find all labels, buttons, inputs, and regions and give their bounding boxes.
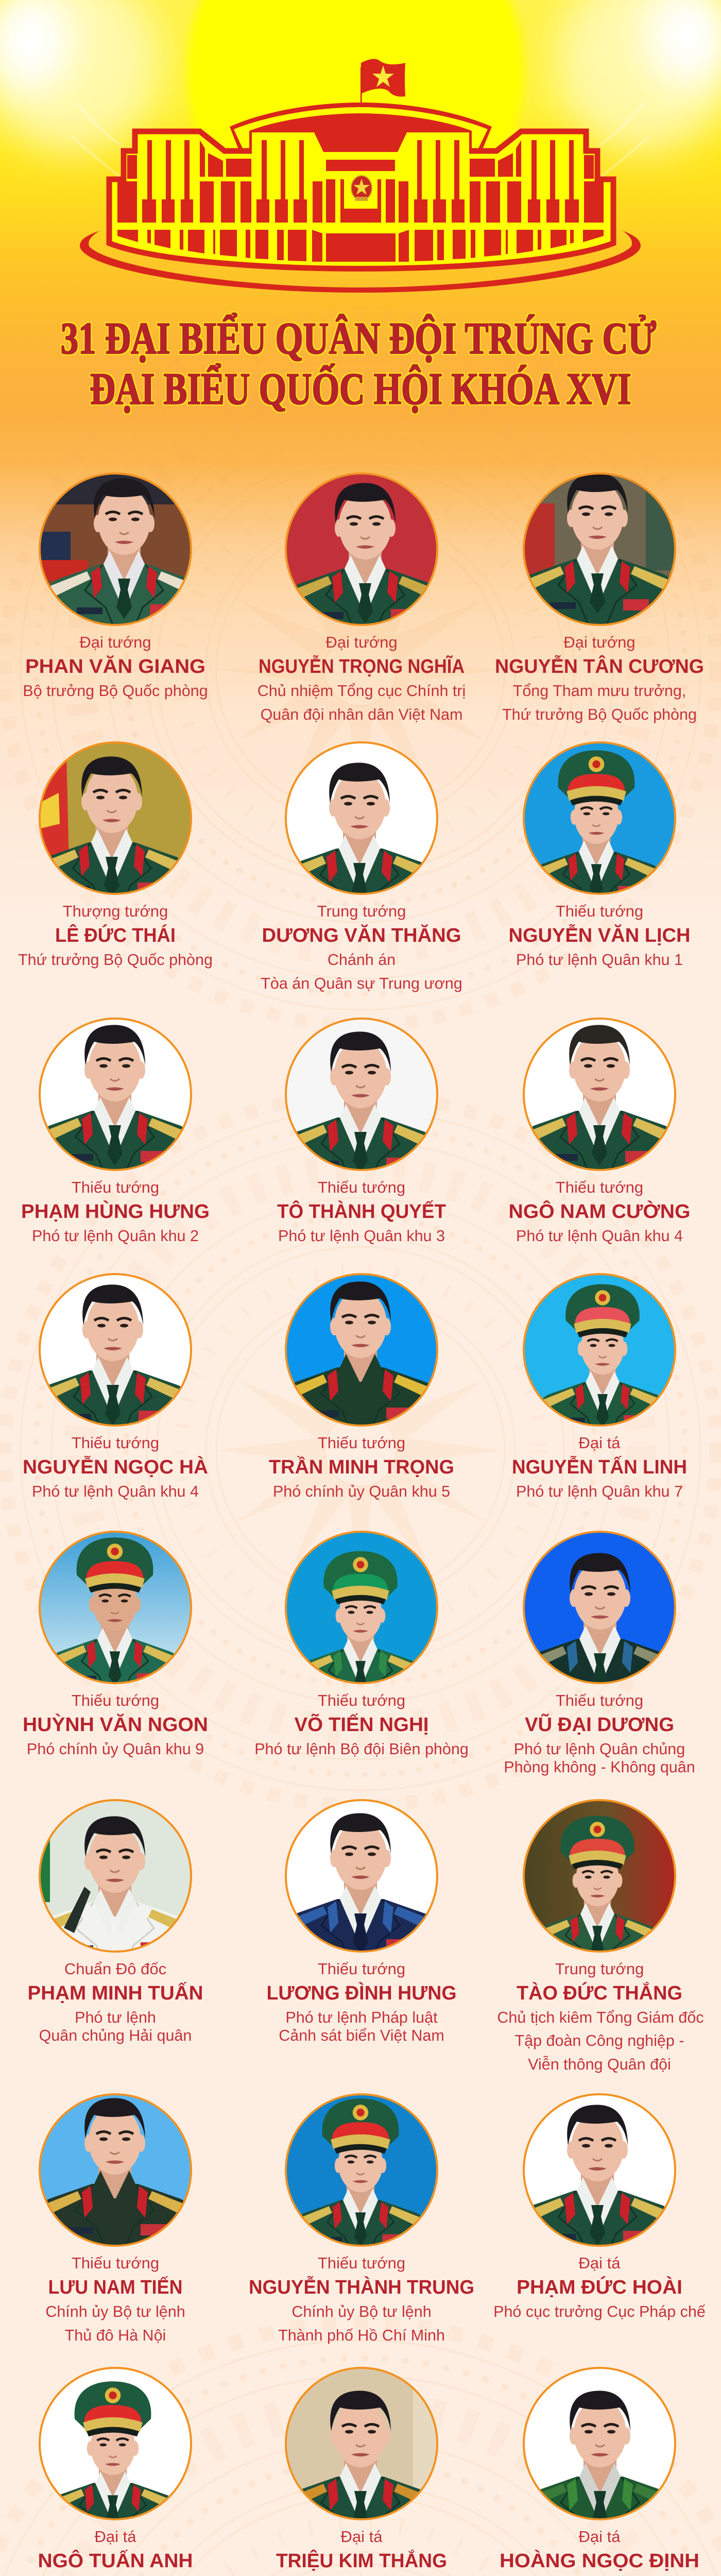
name: TRIỆU KIM THẮNG	[276, 2549, 447, 2572]
portrait	[29, 1531, 200, 1738]
role: Chánh án	[328, 951, 396, 969]
role: Tổng Tham mưu trưởng,	[513, 682, 686, 700]
rank: Thượng tướng	[63, 902, 168, 920]
rank: Thiếu tướng	[318, 1691, 405, 1709]
name: HOÀNG NGỌC ĐỊNH	[500, 2549, 699, 2572]
rank: Chuẩn Đô đốc	[64, 1960, 166, 1978]
panel: Ngô Tuấn Anh	[2, 2367, 229, 2576]
rank: Thiếu tướng	[556, 1691, 643, 1709]
role: Thủ đô Hà Nội	[65, 2327, 166, 2344]
panel: Phạm Hùng Hưng	[21, 1018, 210, 1245]
icon: base ring	[80, 231, 641, 293]
name: VÕ TIẾN NGHỊ	[295, 1713, 428, 1736]
portrait	[14, 1799, 215, 2019]
name: NGÔ NAM CƯỜNG	[509, 1199, 690, 1223]
panel: Lê Đức Thái	[18, 741, 213, 969]
rank: Đại tá	[341, 2528, 383, 2546]
name: TÔ THÀNH QUYẾT	[277, 1199, 446, 1223]
name: NGUYỄN VĂN LỊCH	[509, 924, 690, 946]
icon: building facade	[109, 131, 613, 269]
role: Quân đội nhân dân Việt Nam	[261, 706, 462, 723]
role: Bộ trưởng Bộ Quốc phòng	[23, 682, 208, 700]
role	[502, 682, 697, 723]
name: PHẠM HÙNG HƯNG	[21, 1200, 210, 1223]
panel: Phan Văn Giang	[23, 472, 208, 700]
panel: Lương Đình Hưng	[248, 1799, 475, 2047]
role: Cảnh sát biển Việt Nam	[279, 2027, 444, 2044]
portrait	[27, 2367, 198, 2576]
panel: Võ Tiến Nghị	[248, 1531, 475, 1760]
portrait	[285, 472, 438, 626]
role: Thứ trưởng Bộ Quốc phòng	[18, 951, 213, 969]
role	[278, 2303, 445, 2344]
panel: Tào Đức Thắng	[486, 1799, 713, 2070]
rank: Đại tướng	[325, 633, 398, 651]
rank: Đại tá	[579, 1434, 621, 1452]
panel: Vũ Đại Dương	[486, 1531, 713, 1778]
rank: Thiếu tướng	[556, 1178, 643, 1196]
role: Phòng không - Không quân	[504, 1758, 695, 1776]
name: VŨ ĐẠI DƯƠNG	[525, 1713, 674, 1736]
role: Phó tư lệnh Bộ đội Biên phòng	[254, 1740, 469, 1758]
portrait	[523, 472, 676, 626]
panel: Trần Minh Trọng	[248, 1273, 475, 1503]
portrait	[497, 2093, 698, 2307]
role: Thành phố Hồ Chí Minh	[278, 2327, 445, 2344]
role: Phó tư lệnh Quân khu 1	[516, 951, 683, 969]
role: Phó tư lệnh Quân khu 7	[516, 1483, 683, 1500]
panel: Triệu Kim Thắng	[248, 2367, 475, 2576]
rank: Thiếu tướng	[72, 2254, 159, 2272]
role: Phó tư lệnh Quân chủng	[514, 1740, 685, 1758]
name: TÀO ĐỨC THẮNG	[517, 1981, 682, 2004]
role	[258, 682, 466, 723]
rank: Trung tướng	[555, 1960, 644, 1978]
portrait	[515, 1799, 680, 2009]
name: LÊ ĐỨC THÁI	[55, 924, 176, 946]
name: NGUYỄN THÀNH TRUNG	[249, 2276, 474, 2298]
panel: Hoàng Ngọc Định	[486, 2367, 713, 2576]
portrait	[278, 1531, 443, 1744]
name: NGÔ TUẤN ANH	[38, 2549, 193, 2572]
icon: National Assembly building with flag	[39, 59, 676, 889]
name: PHẠM ĐỨC HOÀI	[517, 2276, 682, 2298]
rank: Thiếu tướng	[318, 2254, 405, 2272]
role: Viễn thông Quân đội	[528, 2055, 671, 2073]
role: Chủ tịch kiêm Tổng Giám đốc	[497, 2009, 704, 2026]
role: Thứ trưởng Bộ Quốc phòng	[502, 706, 697, 723]
panel: Phạm Minh Tuấn	[2, 1799, 229, 2047]
role: Tòa án Quân sự Trung ương	[261, 975, 462, 992]
name: LƯƠNG ĐÌNH HƯNG	[267, 1981, 456, 2004]
rank: Thiếu tướng	[72, 1434, 159, 1452]
rank: Đại tá	[95, 2528, 136, 2546]
rank: Thiếu tướng	[556, 902, 643, 920]
portrait	[39, 472, 192, 626]
role	[497, 2009, 704, 2073]
name: DƯƠNG VĂN THĂNG	[262, 924, 461, 946]
role: Chính ủy Bộ tư lệnh	[45, 2303, 185, 2320]
panel: Nguyễn Thành Trung	[248, 2093, 475, 2347]
panel: Ngô Nam Cường	[486, 1018, 713, 1247]
role: Phó chính ủy Quân khu 9	[27, 1740, 204, 1758]
name: NGUYỄN TRỌNG NGHĨA	[259, 655, 465, 677]
background: top glow	[0, 0, 721, 180]
name: PHAN VĂN GIANG	[25, 655, 205, 677]
role	[45, 2303, 185, 2344]
panel: Nguyễn Ngọc Hà	[2, 1273, 229, 1503]
role: Chủ nhiệm Tổng cục Chính trị	[258, 682, 466, 700]
name: TRẦN MINH TRỌNG	[269, 1455, 454, 1478]
panel: Nguyễn Tân Cương	[495, 472, 704, 723]
icon: dome	[230, 103, 492, 155]
role: Quân chủng Hải quân	[39, 2027, 192, 2044]
portrait	[260, 2367, 461, 2576]
rank: Đại tướng	[563, 633, 636, 651]
name: NGUYỄN NGỌC HÀ	[23, 1455, 208, 1478]
portrait	[500, 1531, 700, 1755]
portrait	[259, 741, 460, 965]
rank: Thiếu tướng	[72, 1178, 159, 1196]
portrait	[520, 1273, 685, 1478]
portrait	[499, 1018, 700, 1227]
portrait	[14, 1018, 215, 1227]
portrait	[14, 2093, 215, 2300]
portrait	[260, 1018, 461, 1234]
name: HUỲNH VĂN NGON	[23, 1713, 208, 1736]
panel: Dương Văn Thăng	[261, 741, 462, 992]
role: Phó tư lệnh Quân khu 2	[32, 1227, 199, 1245]
rank: Thiếu tướng	[318, 1434, 405, 1452]
portrait	[275, 2093, 446, 2299]
role: Phó tư lệnh Quân khu 4	[32, 1483, 199, 1500]
role: Phó tư lệnh	[75, 2009, 156, 2026]
role: Phó tư lệnh Quân khu 3	[278, 1227, 445, 1245]
role	[279, 2009, 444, 2044]
rank: Thiếu tướng	[318, 1960, 405, 1978]
role	[39, 2009, 192, 2044]
portrait	[12, 1273, 213, 1487]
panel: Phạm Đức Hoài	[486, 2093, 713, 2323]
rank: Đại tá	[579, 2254, 621, 2272]
icon: national emblem	[351, 176, 372, 201]
rank: Thiếu tướng	[72, 1691, 159, 1709]
role	[261, 951, 462, 992]
panel: Huỳnh Văn Ngon	[2, 1531, 229, 1760]
panel: Nguyễn Văn Lịch	[509, 741, 690, 969]
rank: Thiếu tướng	[318, 1178, 405, 1196]
icon: flag	[360, 59, 405, 103]
rank: Trung tướng	[317, 902, 406, 920]
portrait	[260, 1799, 461, 2015]
name: NGUYỄN TÂN CƯƠNG	[495, 655, 704, 677]
rank: Đại tá	[579, 2528, 621, 2546]
title	[60, 311, 658, 414]
portrait	[260, 1273, 461, 1484]
role: Phó tư lệnh Quân khu 4	[516, 1227, 683, 1245]
role: Chính ủy Bộ tư lệnh	[291, 2303, 432, 2320]
name: NGUYỄN TẤN LINH	[512, 1455, 687, 1478]
panel: Nguyễn Tấn Linh	[486, 1273, 713, 1503]
panel: Nguyễn Trọng Nghĩa	[258, 472, 466, 723]
portrait	[11, 741, 212, 959]
role: Phó tư lệnh Pháp luật	[285, 2009, 438, 2026]
role: Phó cục trưởng Cục Pháp chế	[493, 2303, 706, 2320]
role	[504, 1740, 695, 1776]
portrait	[500, 2367, 700, 2576]
role: Tập đoàn Công nghiệp -	[515, 2032, 684, 2049]
role: Phó chính ủy Quân khu 5	[273, 1483, 450, 1500]
name: LƯU NAM TIẾN	[48, 2276, 182, 2298]
panel: Lưu Nam Tiến	[2, 2093, 229, 2347]
panel: Tô Thành Quyết	[248, 1018, 475, 1247]
rank: Đại tướng	[79, 633, 151, 651]
name: PHẠM MINH TUẤN	[28, 1981, 203, 2004]
portrait	[511, 741, 682, 951]
